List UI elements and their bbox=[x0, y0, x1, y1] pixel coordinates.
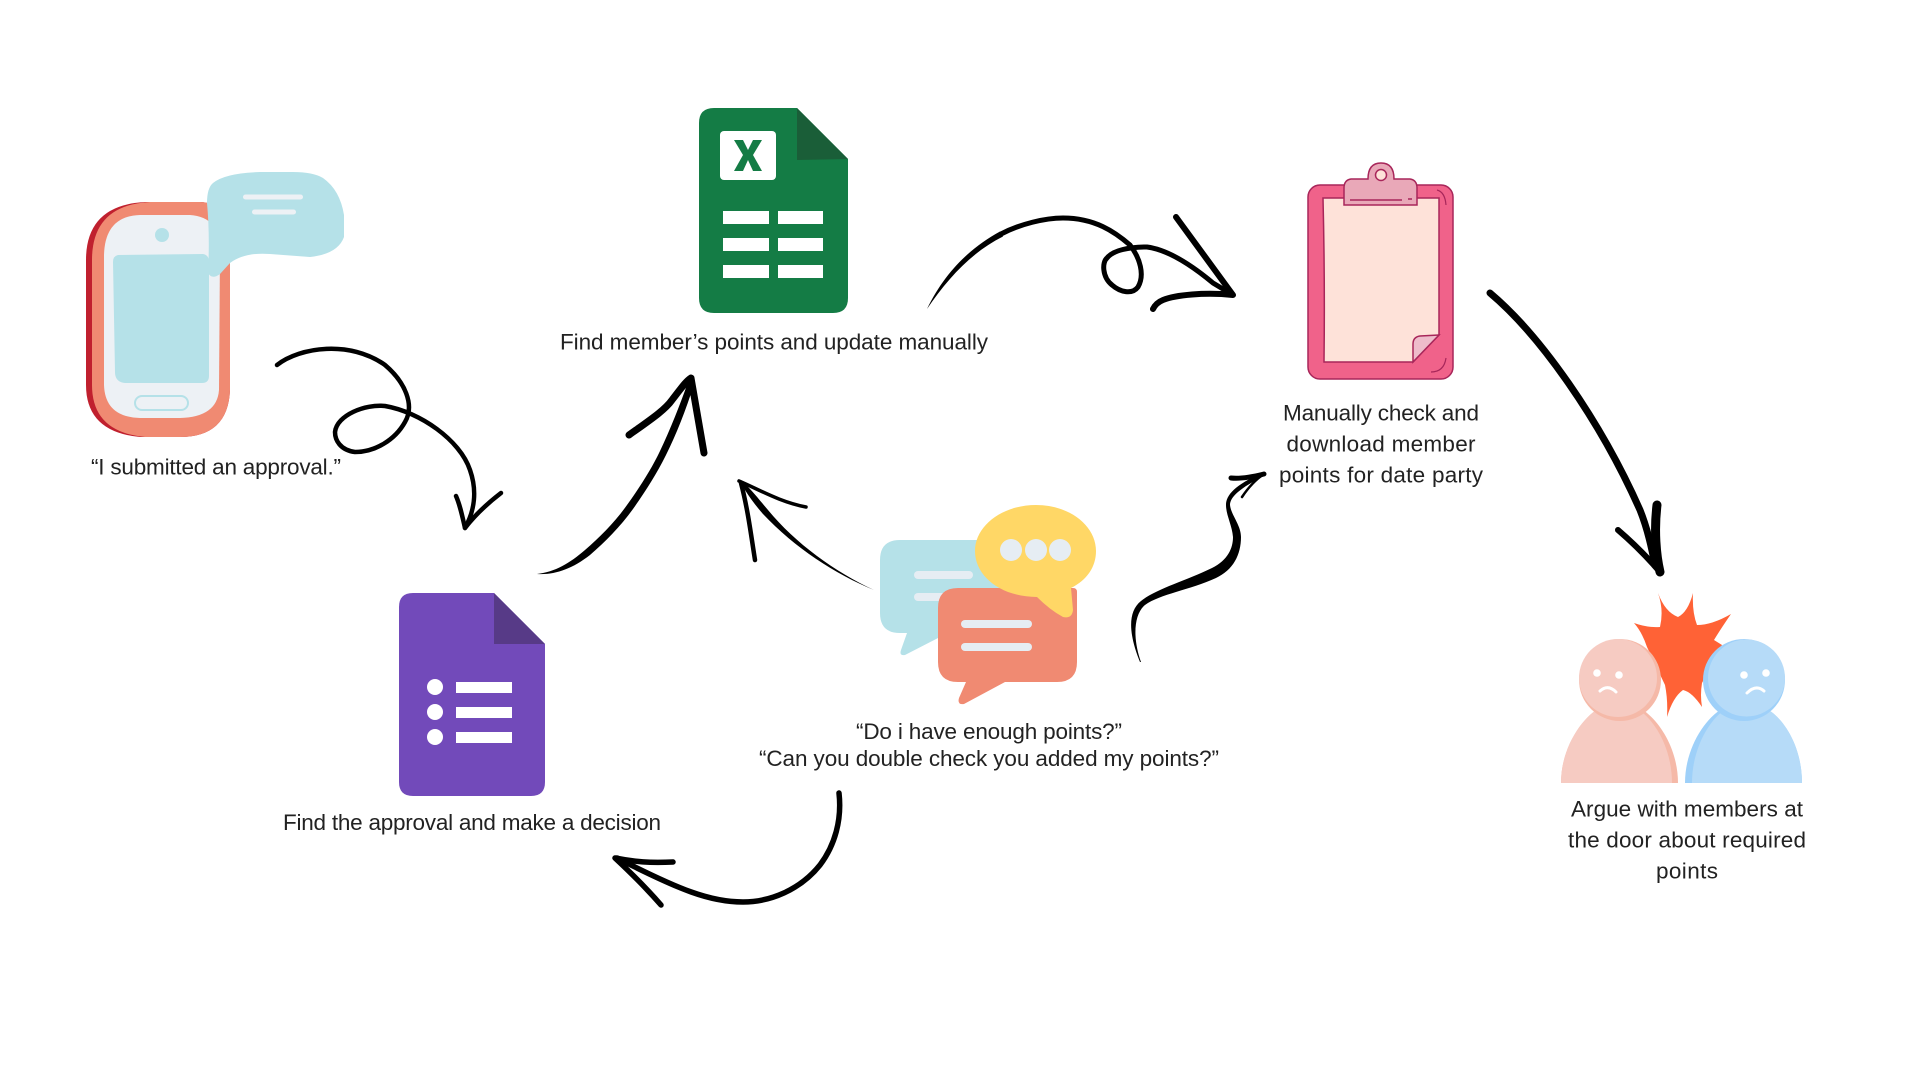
text: argument caption bbox=[1568, 796, 1806, 884]
text: form caption: Find the approval and make a decision bbox=[283, 810, 661, 835]
icon: pink clipboard bbox=[1308, 163, 1453, 379]
arrow: clipboard to argument bbox=[1490, 293, 1660, 572]
text: member questions: “Can you double check you added my points?” bbox=[759, 746, 1219, 771]
arrow: form to spreadsheet bbox=[537, 378, 704, 574]
text: argument caption: Argue with members at bbox=[1571, 796, 1804, 822]
icon: green spreadsheet document bbox=[699, 108, 848, 313]
icon: phone with speech bubble bbox=[86, 172, 344, 437]
text: phone caption: “I submitted an approval.” bbox=[91, 454, 341, 480]
icon: three overlapping chat bubbles bbox=[880, 505, 1096, 704]
arrow: questions to clipboard bbox=[1131, 473, 1264, 662]
arrow: phone to form bbox=[277, 349, 501, 528]
text: spreadsheet caption: Find member’s points and update manually bbox=[560, 330, 989, 354]
text: clipboard caption: Manually check and bbox=[1283, 400, 1479, 426]
text: clipboard caption: download member bbox=[1286, 432, 1476, 456]
text: member questions: “Do i have enough points?” bbox=[856, 719, 1122, 744]
text: argument caption: the door about required bbox=[1568, 828, 1806, 852]
icon: two arguing people with burst bbox=[1561, 593, 1802, 783]
arrow: spreadsheet to clipboard bbox=[927, 217, 1233, 309]
icon: purple form document bbox=[399, 593, 545, 796]
text: clipboard caption: points for date party bbox=[1279, 462, 1484, 488]
text: clipboard caption bbox=[1279, 400, 1484, 488]
arrow: questions to form bbox=[615, 793, 840, 905]
text: argument caption: points bbox=[1656, 858, 1718, 884]
text: member questions bbox=[759, 719, 1219, 771]
arrow: questions to spreadsheet bbox=[739, 480, 874, 590]
